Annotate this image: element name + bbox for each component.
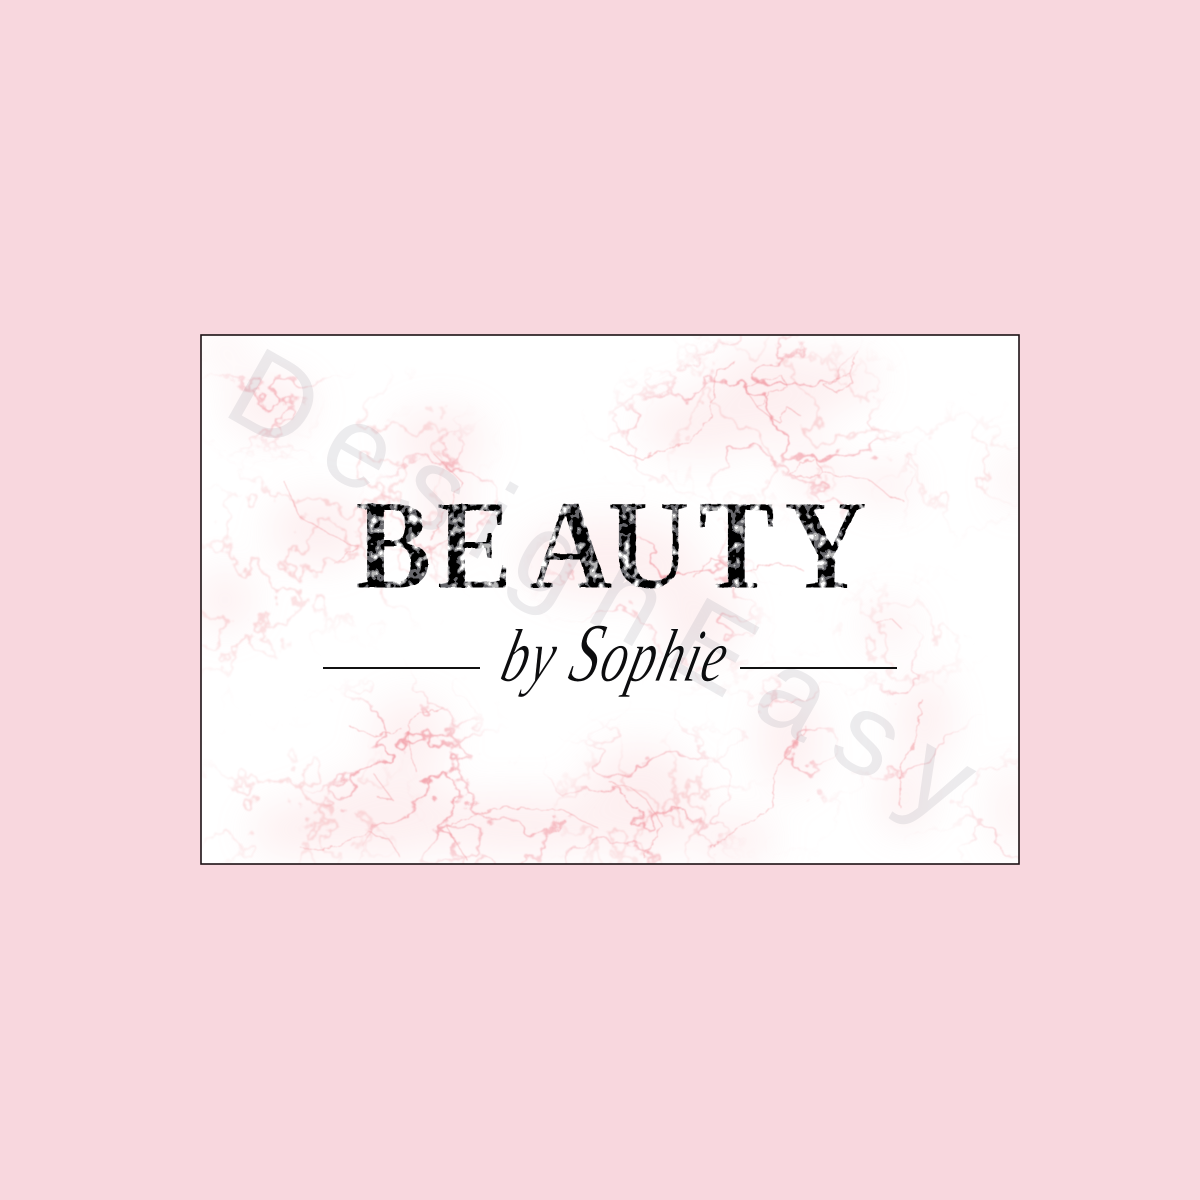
- divider line: right: [740, 667, 897, 669]
- panel: marble business card: [190, 334, 1029, 870]
- watermark: DesignEasy: DesignEasy: [208, 323, 998, 846]
- card border: [201, 335, 1019, 864]
- divider line: left: [323, 667, 480, 669]
- logo subtitle: by Sophie: by Sophie: [493, 606, 741, 699]
- logo title: BEAUTY in leopard texture: BEAUTY: [355, 474, 867, 616]
- marble texture: [190, 334, 1029, 870]
- business card mockup on pink background: [200, 334, 1020, 865]
- card white base: [201, 335, 1019, 864]
